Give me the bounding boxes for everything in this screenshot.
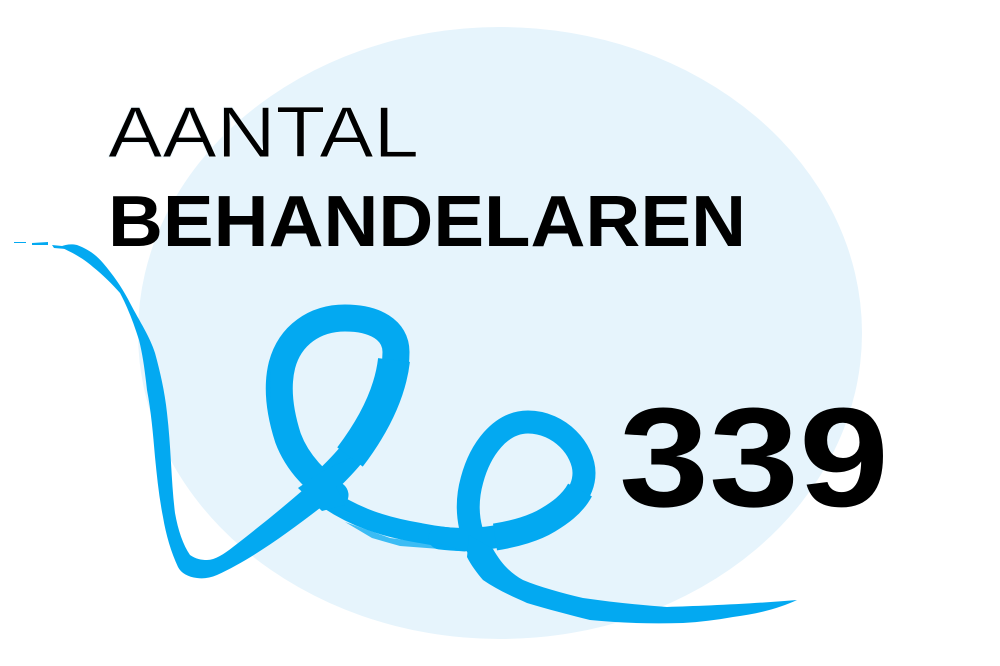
crossing patch xyxy=(298,458,350,511)
title: behandelaren: BEHANDELAREN xyxy=(108,182,746,262)
brush fragments xyxy=(14,242,468,552)
brush stroke line xyxy=(14,242,797,623)
title: aantal: AANTAL xyxy=(108,93,419,173)
number: 339: 339 xyxy=(619,378,889,536)
background circle xyxy=(138,27,862,639)
